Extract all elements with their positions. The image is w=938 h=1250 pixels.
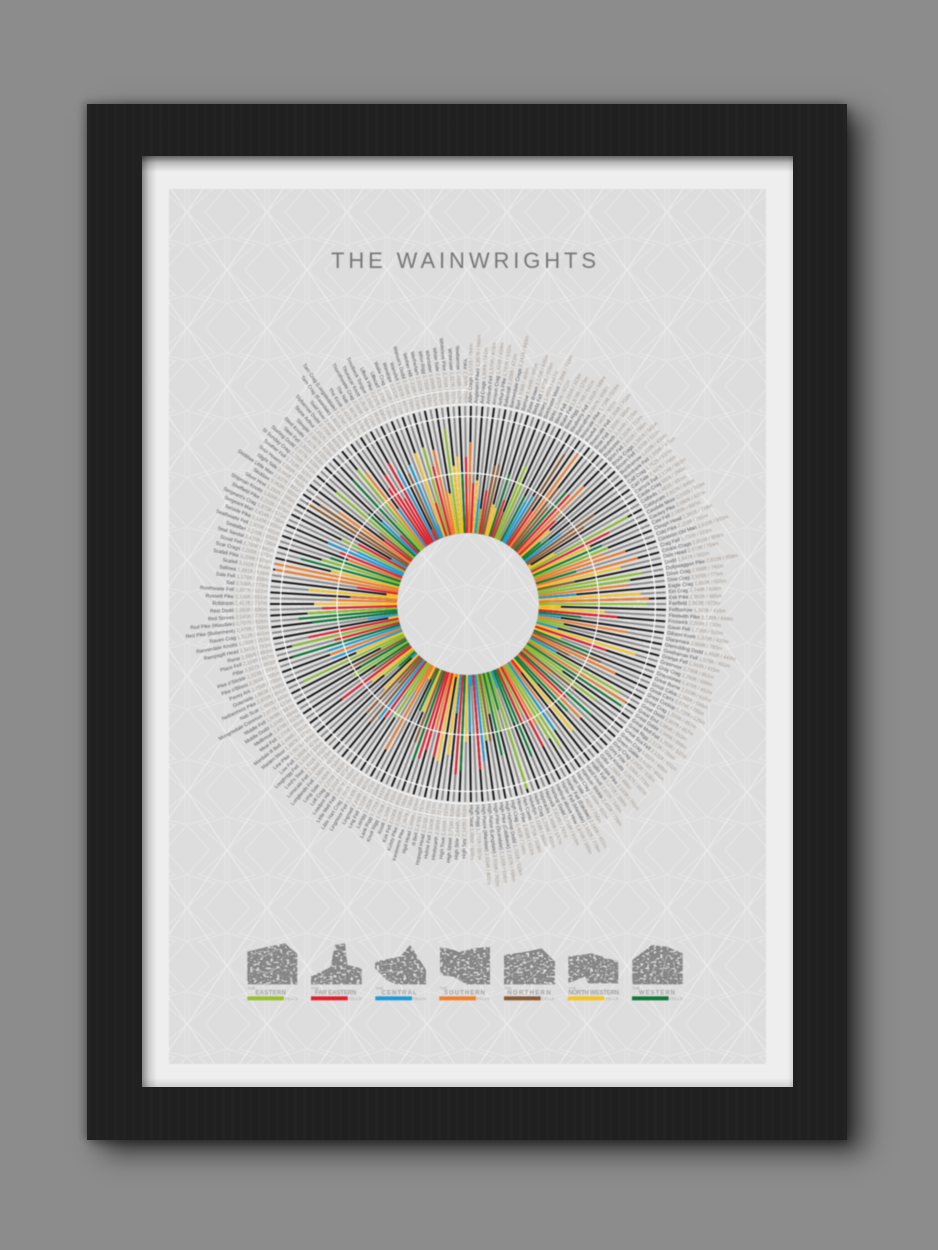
fell labels: High Spy to Yoke, left half: Stone Arthur 1,652ft / 503m xyxy=(293,405,338,455)
fell labels: Allen Crags to High Seat, right half: Allen Crags 2,572ft / 784m xyxy=(468,344,475,403)
fell labels: Allen Crags to High Seat, right half: Angletarn Pikes 1,857ft / 566m xyxy=(474,335,483,403)
fell labels: High Spy to Yoke, left half: Mardale Ill Bell 2,496ft / 761m xyxy=(253,723,309,767)
fell labels: High Spy to Yoke, left half: Skiddaw 3,053ft / 931m xyxy=(252,467,299,500)
fell labels: Allen Crags to High Seat, right half: Black Fell 1,056ft / 323m xyxy=(554,373,583,425)
fell labels: Allen Crags to High Seat, right half: Grange Fell 1,363ft / 415m xyxy=(661,653,720,675)
fell labels: High Spy to Yoke, left half: Whinlatter 1,696ft / 525m xyxy=(424,350,438,406)
fell labels: High Spy to Yoke, left half: Long Side 2,405ft / 734m xyxy=(302,757,342,804)
fell labels: Allen Crags to High Seat, right half: Blake Fell 1,878ft / 573m xyxy=(559,376,590,428)
fell labels: High Spy to Yoke, left half: Thornthwaite Crag 2,569ft / 784m xyxy=(330,363,372,430)
fell labels: High Spy to Yoke, left half: Rest Dodd 2,283ft / 696m xyxy=(210,607,267,615)
fell labels: High Spy to Yoke, left half: Lonscale Fell 2,344ft / 715m xyxy=(286,749,333,799)
fell labels: Allen Crags to High Seat, right half: Grey Knotts 2,287ft / 697m xyxy=(603,749,648,797)
fell labels: Allen Crags to High Seat, right half: Glaramara 2,569ft / 783m xyxy=(665,636,723,652)
legend: Western Fells: FELLS xyxy=(670,996,683,1001)
fell labels: Allen Crags to High Seat, right half: Brae Fell 1,920ft / 586m xyxy=(594,406,632,451)
title: THE WAINWRIGHTS xyxy=(331,248,596,273)
legend: North Western Fells: NORTH WESTERN xyxy=(568,991,619,997)
fell labels: High Spy to Yoke, left half: Meal Fell 1,770ft / 550m xyxy=(258,718,306,754)
fell labels: High Spy to Yoke, left half: Rossett Pike 2,106ft / 651m xyxy=(206,593,267,601)
fell labels: High Spy to Yoke, left half: Little Mell Fell 1,657ft / 505m xyxy=(315,768,357,824)
legend of fell regions xyxy=(247,943,683,1001)
fell labels: Allen Crags to High Seat, right half: High Hartsop Dodd 1,702ft / 519m xyxy=(503,801,523,876)
fell labels: High Spy to Yoke, left half: Nethermost Pike 2,920ft / 891m xyxy=(221,687,287,722)
fell labels: High Spy to Yoke, left half: Skiddaw Little Man 2,837ft / 865m xyxy=(236,449,302,495)
fell labels: High Spy to Yoke, left half: Little Hart Crag 2,091ft / 637m xyxy=(320,771,362,831)
fell labels: Allen Crags to High Seat, right half: Great Borne 2,019ft / 616m xyxy=(653,676,712,704)
fell labels: High Spy to Yoke, left half: Steel Fell 1,811ft / 553m xyxy=(282,426,325,467)
fell labels: High Spy to Yoke, left half: Scoat Fell 2,760ft / 841m xyxy=(219,534,275,555)
fell labels: High Spy to Yoke, left half: Scafell Pike 3,209ft / 978m xyxy=(212,548,272,566)
fell labels: High Spy to Yoke, left half: Slight Side 2,499ft / 762m xyxy=(255,452,306,490)
fell labels: High Spy to Yoke, left half xyxy=(185,338,468,866)
fell labels: Allen Crags to High Seat, right half: High Raise (Mardale) 2,634ft / 802m xyxy=(480,804,492,885)
fell labels: Allen Crags to High Seat, right half: Gibson Knott 1,379ft / 420m xyxy=(666,630,729,645)
fell labels: High Spy to Yoke, left half: Steel Knotts 1,417ft / 432m xyxy=(282,416,329,463)
fell labels: Allen Crags to High Seat, right half: Hartsop above How 1,870ft / 580m xyxy=(554,783,593,855)
fell labels: Allen Crags to High Seat, right half: Arnison Crag 1,424ft / 434m xyxy=(492,342,506,405)
fell labels: High Spy to Yoke, left half: Seat Sandal 2,415ft / 736m xyxy=(217,526,276,549)
fell labels: Allen Crags to High Seat, right half: Helm Crag 1,299ft / 405m xyxy=(532,793,556,849)
poster print with geometric pattern xyxy=(169,189,766,1064)
fell labels: High Spy to Yoke, left half: The Nab 1,887ft / 576m xyxy=(334,385,367,433)
fell labels: Allen Crags to High Seat, right half: Ard Crags 1,906ft / 581m xyxy=(480,348,490,404)
fell labels: Allen Crags to High Seat, right half: Great Carrs 2,575ft / 785m xyxy=(649,687,705,718)
fell labels: High Spy to Yoke, left half: High Stile 2,644ft / 806m xyxy=(454,805,462,860)
fell labels: High Spy to Yoke, left half: Tarn Crag (Longsleddale) 2,176ft / 664m xyxy=(301,363,357,440)
fell labels: Allen Crags to High Seat, right half: Heron Pike 2,008ft / 612m xyxy=(515,798,535,856)
legend: North Western Fells xyxy=(568,953,619,1001)
fell labels: Allen Crags to High Seat, right half: High Crag 2,443ft / 744m xyxy=(509,800,527,855)
fell labels: High Spy to Yoke, left half: Hopegill Head 2,525ft / 770m xyxy=(415,801,433,866)
fell labels: High Spy to Yoke, left half: Whin Rigg 1,755ft / 535m xyxy=(416,351,433,407)
fell labels: Allen Crags to High Seat, right half: Crag Fell 1,710ft / 523m xyxy=(660,528,713,549)
fell labels: High Spy to Yoke, left half: Knott Rigg 1,790ft / 556m xyxy=(366,788,393,843)
fell labels: Allen Crags to High Seat, right half: Birkhouse Moor 2,356ft / 718m xyxy=(543,354,575,420)
fell labels: Allen Crags to High Seat, right half: Harter Fell (Mardale) 2,552ft / 778m xyxy=(559,780,601,854)
fell labels: High Spy to Yoke, left half: Stybarrow Dodd 2,770ft / 843m xyxy=(294,394,342,451)
fell labels: Allen Crags to High Seat, right half: Grike 1,596ft / 488m xyxy=(598,753,633,791)
legend: Southern Fells: THE xyxy=(439,985,448,990)
fell labels: High Spy to Yoke, left half: High Spy 2,143ft / 653m xyxy=(461,805,468,859)
fell labels: Allen Crags to High Seat, right half: Great Dodd 2,807ft / 857m xyxy=(640,703,694,738)
fell labels: Allen Crags to High Seat, right half: Base Brown 2,120ft / 646m xyxy=(526,354,550,413)
fell labels: Allen Crags to High Seat, right half: Gavel Fell 1,726ft / 526m xyxy=(667,624,723,637)
fell labels: High Spy to Yoke, left half: Loadpot Hill 2,201ft / 671m xyxy=(312,764,352,816)
fell labels: Allen Crags to High Seat, right half: Dodd 1,647ft / 502m xyxy=(664,551,710,566)
fell labels: Allen Crags to High Seat, right half: Hen Comb 1,670ft / 509m xyxy=(521,796,542,853)
fell labels: High Spy to Yoke, left half: Kentmere Pike 2,397ft / 730m xyxy=(391,796,415,862)
fell labels: High Spy to Yoke, left half: Whiteless Pike 2,159ft / 660m xyxy=(438,338,450,404)
legend: North Western Fells: THE xyxy=(568,985,577,990)
fell labels: Allen Crags to High Seat, right half: Clough Head 2,381ft / 726m xyxy=(653,503,714,532)
fell labels: Allen Crags to High Seat, right half: Hallin Fell 1,271ft / 388m xyxy=(589,761,628,808)
fell labels: Allen Crags to High Seat, right half: Caw Fell 2,288ft / 697m xyxy=(651,500,702,526)
legend: Eastern Fells: EASTERN xyxy=(255,991,286,997)
legend: Far Eastern Fells xyxy=(311,943,362,1001)
fell labels: Allen Crags to High Seat, right half: Castle Crag 985ft / 290m xyxy=(637,465,687,500)
fell labels: High Spy to Yoke, left half: Yewbarrow 2,058ft / 628m xyxy=(454,345,462,403)
radial chart xyxy=(139,335,738,913)
legend: Eastern Fells: THE xyxy=(247,985,256,990)
legend: Western Fells: THE xyxy=(632,985,640,990)
fell labels: High Spy to Yoke, left half: Rosthwaite Fell 1,807ft / 551m xyxy=(200,585,268,595)
fell labels: Allen Crags to High Seat, right half: Great Rigg 2,513ft / 766m xyxy=(627,723,676,762)
fell labels: Allen Crags to High Seat, right half: Barrow 1,494ft / 455m xyxy=(521,363,540,412)
fell labels: High Spy to Yoke, left half: Mellbreak 1,676ft / 512m xyxy=(253,713,302,748)
legend: Far Eastern Fells: FELLS xyxy=(349,996,362,1001)
fell labels: Allen Crags to High Seat, right half: Hartsop Dodd 2,018ft / 618m xyxy=(548,786,580,847)
fell labels: High Spy to Yoke, left half: Pike o'Stickle 2,323ft / 709m xyxy=(217,665,278,691)
fell labels: High Spy to Yoke, left half: The Knott 2,423ft / 739m xyxy=(327,387,362,437)
fell labels: High Spy to Yoke, left half: Starling Dodd 2,077ft / 633m xyxy=(270,424,321,471)
fell labels: High Spy to Yoke, left half: Kidsty Pike 2,560ft / 780m xyxy=(386,795,410,852)
fell labels: Allen Crags to High Seat, right half: Great Cockup 1,720ft / 526m xyxy=(646,692,706,727)
fell labels: High Spy to Yoke, left half: Pike o'Blisco 2,304ft / 705m xyxy=(221,671,280,697)
fell labels: Allen Crags to High Seat, right half: Calf Crag 1,762ft / 537m xyxy=(627,448,674,485)
fell labels: Allen Crags to High Seat, right half: Fairfield 2,863ft / 873m xyxy=(669,601,720,607)
fell labels: High Spy to Yoke, left half: Walla Crag 1,234ft / 379m xyxy=(372,361,399,417)
fell labels: Allen Crags to High Seat, right half: Broom Fell 1,670ft / 511m xyxy=(615,429,662,471)
fell labels: Allen Crags to High Seat, right half: Great Sca Fell 2,131ft / 651m xyxy=(623,727,678,773)
fell labels: Allen Crags to High Seat, right half: Great End 2,984ft / 910m xyxy=(637,708,688,743)
fell labels: Allen Crags to High Seat, right half: Barf 1,536ft / 468m xyxy=(515,367,531,410)
fell labels: High Spy to Yoke, left half: Hindscarth 2,385ft / 727m xyxy=(431,803,444,860)
fell labels: High Spy to Yoke, left half: Low Pike 1,667ft / 508m xyxy=(272,732,317,771)
legend: Central Fells: FELLS xyxy=(413,996,426,1001)
fell labels: Allen Crags to High Seat, right half: Graystones 1,476ft / 452m xyxy=(656,671,713,697)
fell labels: Allen Crags to High Seat, right half: Helvellyn 3,118ft / 950m xyxy=(526,795,548,847)
legend: Western Fells: WESTERN xyxy=(639,991,675,997)
fell labels: Allen Crags to High Seat, right half: Branstree 2,333ft / 713m xyxy=(603,414,644,459)
fell labels: Allen Crags to High Seat, right half: Armboth Fell 1,570ft / 479m xyxy=(486,342,498,404)
fell labels: Allen Crags to High Seat, right half: Causey Pike 2,090ft / 637m xyxy=(649,490,707,521)
legend: Western Fells xyxy=(632,945,683,1001)
fell labels: High Spy to Yoke, left half: Pillar 2,927ft / 892m xyxy=(232,659,276,678)
fell labels: Allen Crags to High Seat, right half: High Pike (Caldbeck) 2,157ft / 658m xyxy=(498,802,516,882)
fell labels: Allen Crags to High Seat, right half: Cold Pike 2,259ft / 701m xyxy=(656,513,709,537)
legend: Eastern Fells: FELLS xyxy=(285,996,298,1001)
fell labels: High Spy to Yoke, left half: Maiden Moor 1,887ft / 575m xyxy=(260,727,313,771)
fell labels: Allen Crags to High Seat, right half: Bannerdale Crags 2,241ft / 683m xyxy=(509,335,531,408)
fell labels: High Spy to Yoke, left half: Low Fell 1,360ft / 423m xyxy=(278,737,321,776)
white guide rings xyxy=(254,390,682,818)
fell labels: Allen Crags to High Seat, right half: Bleaberry Fell 1,932ft / 589m xyxy=(569,375,608,433)
fell labels: Allen Crags to High Seat, right half: Fellbarrow 1,363ft / 416m xyxy=(669,607,726,615)
fell labels: High Spy to Yoke, left half: Troutbeck Tongue 1,191ft / 364m xyxy=(345,357,382,425)
black and grey spokes xyxy=(139,347,729,913)
fell labels: High Spy to Yoke, left half: Red Pike (Wasdale) 2,707ft / 826m xyxy=(190,619,268,631)
fell labels: Allen Crags to High Seat, right half: Crinkle Crags 2,816ft / 859m xyxy=(661,532,724,555)
fell labels: Allen Crags to High Seat, right half: Catbells 1,481ft / 451m xyxy=(640,474,687,505)
fell labels: Allen Crags to High Seat, right half: Gowbarrow Fell 1,579ft / 481m xyxy=(663,648,731,670)
fell labels: Allen Crags to High Seat, right half: Dollywaggon Pike 2,810ft / 858m xyxy=(665,553,738,572)
fell labels: High Spy to Yoke, left half: Tarn Crag (Easedale) 1,801ft / 550m xyxy=(299,375,352,444)
fell labels: High Spy to Yoke, left half: High Tove 1,665ft / 515m xyxy=(439,804,450,859)
fell labels: Allen Crags to High Seat, right half: Green Gable 2,628ft / 801m xyxy=(615,737,665,783)
fell labels: Allen Crags to High Seat, right half: Buckbarrow 1,410ft / 430m xyxy=(619,433,669,476)
fell labels: Allen Crags to High Seat, right half: Dove Crag 2,598ft / 792m xyxy=(666,563,724,578)
fell labels: High Spy to Yoke, left half: Silver How 1,292ft / 395m xyxy=(244,471,296,505)
fell labels: High Spy to Yoke, left half: Raise 2,889ft / 883m xyxy=(227,648,273,665)
fell labels: High Spy to Yoke, left half: Robinson 2,417ft / 737m xyxy=(213,601,267,607)
fell labels: Allen Crags to High Seat, right half: Caudale Moor 2,502ft / 763m xyxy=(646,481,706,516)
fell labels: Allen Crags to High Seat, right half: Coniston Old Man 2,633ft / 803m xyxy=(658,514,729,543)
fell labels: High Spy to Yoke, left half: Thunacar Knott 2,351ft / 723m xyxy=(340,365,377,428)
fell labels: High Spy to Yoke, left half: Sale Fell 1,178ft / 359m xyxy=(216,571,269,584)
fell labels: High Spy to Yoke, left half: Ling Fell 1,224ft / 373m xyxy=(347,780,377,829)
fell labels: High Spy to Yoke, left half: Scafell 3,162ft / 964m xyxy=(222,557,271,572)
fell labels: High Spy to Yoke, left half: Loughrigg Fell 1,101ft / 335m xyxy=(274,741,325,790)
fell labels: High Spy to Yoke, left half: St Sunday Crag 2,756ft / 841m xyxy=(261,427,317,476)
fell labels: Allen Crags to High Seat, right half: Dale Head 2,473ft / 754m xyxy=(663,541,720,560)
fell labels: Allen Crags to High Seat, right half: Grasmoor 2,795ft / 851m xyxy=(660,659,715,681)
coloured bars by fell height xyxy=(275,429,649,789)
fell labels: High Spy to Yoke, left half: Wether Hill 2,210ft / 670m xyxy=(401,353,421,410)
fell labels: Allen Crags to High Seat, right half: Haystacks 1,959ft / 597m xyxy=(537,791,563,845)
fell labels: High Spy to Yoke, left half: Lingmell 2,649ft / 807m xyxy=(341,778,372,826)
fell labels: Allen Crags to High Seat, right half: High Rigg 1,171ft / 357m xyxy=(474,805,482,860)
fell labels: Allen Crags to High Seat, right half: Catstycam 2,917ft / 890m xyxy=(643,478,696,510)
fell labels: High Spy to Yoke, left half: Kirk Fell 2,630ft / 802m xyxy=(382,793,404,843)
fell labels: High Spy to Yoke, left half: Whiteside 2,317ft / 707m xyxy=(446,348,456,404)
fell labels: High Spy to Yoke, left half: Pavey Ark 2,288ft / 700m xyxy=(229,676,283,703)
fell labels: High Spy to Yoke, left half: Wandope 2,533ft / 772m xyxy=(381,362,404,415)
fell labels: High Spy to Yoke, left half: Rampsgill Head 2,581ft / 792m xyxy=(203,642,272,662)
fell labels: Allen Crags to High Seat, right half: Grey Friar 2,536ft / 773m xyxy=(607,745,650,789)
fell labels: High Spy to Yoke, left half: Souther Fell 1,713ft / 522m xyxy=(262,438,313,481)
legend: Southern Fells: FELLS xyxy=(477,996,490,1001)
fell labels: High Spy to Yoke, left half: Watson's Dodd 2,584ft / 789m xyxy=(391,346,415,412)
fell labels: High Spy to Yoke, left half: Seathwaite Fell 1,970ft / 601m xyxy=(215,508,280,537)
fell labels: High Spy to Yoke, left half: Sour Howes 1,568ft / 483m xyxy=(257,444,309,485)
fell labels: High Spy to Yoke, left half: Holme Fell 1,040ft / 317m xyxy=(423,802,438,859)
fell labels: High Spy to Yoke, left half: Sail 2,536ft / 773m xyxy=(226,580,268,589)
fell labels: Allen Crags to High Seat, right half: Fleetwith Pike 2,126ft / 648m xyxy=(668,613,733,623)
fell labels: Allen Crags to High Seat, right half: Burnbank Fell 1,558ft / 475m xyxy=(623,436,677,481)
legend: Far Eastern Fells: FAR EASTERN xyxy=(315,991,356,997)
fell labels: Allen Crags to High Seat, right half: Brandreth 2,344ft / 715m xyxy=(598,409,639,455)
fell labels: High Spy to Yoke, left half: White Side 2,832ft / 863m xyxy=(431,347,444,405)
fell labels: Allen Crags to High Seat, right half xyxy=(468,335,738,887)
fell labels: Allen Crags to High Seat, right half: Harrison Stickle 2,403ft / 736m xyxy=(579,768,623,828)
fell labels: High Spy to Yoke, left half: Sheffield Pike 2,215ft / 675m xyxy=(230,482,290,516)
fell labels: Allen Crags to High Seat, right half: High Pike (Scandale) 2,155ft / 656m xyxy=(492,803,508,883)
fell labels: Allen Crags to High Seat, right half: Great Crag 1,500ft / 457m xyxy=(643,698,697,731)
legend: Southern Fells xyxy=(439,947,490,1001)
fell labels: Allen Crags to High Seat, right half: Birks 2,040ft / 622m xyxy=(548,379,572,422)
fell labels: High Spy to Yoke, left half: Sallows 1,691ft / 516m xyxy=(219,564,270,578)
fell labels: Allen Crags to High Seat, right half: Great Calva 2,265ft / 690m xyxy=(651,682,708,711)
fell labels: Allen Crags to High Seat, right half: Great Gable 2,949ft / 899m xyxy=(634,713,688,751)
fell labels: Allen Crags to High Seat, right half: Dow Crag 2,555ft / 779m xyxy=(667,571,723,584)
fell labels: Allen Crags to High Seat, right half: Hard Knott 1,803ft / 549m xyxy=(584,764,623,814)
fell labels: High Spy to Yoke, left half: Illgill Head 1,998ft / 609m xyxy=(402,798,421,854)
fell labels: High Spy to Yoke, left half: Lank Rigg 1,775ft / 541m xyxy=(359,786,388,839)
fell labels: Allen Crags to High Seat, right half: Eagle Crag 1,650ft / 503m xyxy=(668,578,727,589)
fell labels: High Spy to Yoke, left half: Seatallan 2,270ft / 692m xyxy=(225,520,278,543)
fell labels: Allen Crags to High Seat, right half: Haycock 2,618ft / 797m xyxy=(543,788,569,839)
fell labels: Allen Crags to High Seat, right half: Bowscale Fell 2,306ft / 702m xyxy=(589,393,633,447)
fell labels: Allen Crags to High Seat, right half: Esk Pike 2,903ft / 885m xyxy=(669,593,722,601)
fell labels: Allen Crags to High Seat, right half: Froswick 2,359ft / 720m xyxy=(668,619,721,629)
fell labels: High Spy to Yoke, left half: Loft Crag 2,270ft / 682m xyxy=(309,761,347,807)
legend: Southern Fells: SOUTHERN xyxy=(444,991,485,997)
fell labels: Allen Crags to High Seat, right half: Bowfell 2,960ft / 902m xyxy=(584,400,618,444)
legend: Far Eastern Fells: THE xyxy=(311,985,319,990)
fell labels: High Spy to Yoke, left half: Ill Bell 2,476ft / 757m xyxy=(411,800,427,846)
fell labels: Allen Crags to High Seat, right half: Glenridding Dodd 1,450ft / 442m xyxy=(664,642,736,663)
fell labels: Allen Crags to High Seat, right half: Blencathra 2,847ft / 868m xyxy=(574,385,610,437)
fell labels: High Spy to Yoke, left half: Longlands Fell 1,580ft / 483m xyxy=(290,753,338,807)
fell labels: Allen Crags to High Seat, right half: High Raise (Langdale) 2,500ft / 762m xyxy=(486,804,500,887)
fell labels: Allen Crags to High Seat, right half: High Seat 1,995ft / 608m xyxy=(468,805,475,860)
picture frame xyxy=(87,104,847,1140)
fell labels: High Spy to Yoke, left half: Nab Scar 1,450ft / 440m xyxy=(239,692,290,722)
fell labels: High Spy to Yoke, left half: Ullscarf 2,370ft / 726m xyxy=(368,371,393,420)
fell labels: Allen Crags to High Seat, right half: Green Crag 1,602ft / 489m xyxy=(619,732,668,775)
fell labels: High Spy to Yoke, left half: Lingmoor Fell 1,530ft / 469m xyxy=(329,775,367,832)
legend: Northern Fells: FELLS xyxy=(542,996,555,1001)
fell labels: High Spy to Yoke, left half: Ullock Pike 2,230ft / 690m xyxy=(358,367,388,422)
legend: Central Fells: CENTRAL xyxy=(382,991,417,997)
fell labels: Allen Crags to High Seat, right half: Gray Crag 2,293ft / 699m xyxy=(658,665,713,689)
legend: Northern Fells: NORTHERN xyxy=(507,991,551,997)
legend: Central Fells xyxy=(375,945,426,1001)
fell labels: High Spy to Yoke, left half: High Street 2,718ft / 828m xyxy=(446,804,456,863)
legend: Eastern Fells xyxy=(247,943,298,1001)
fell labels: High Spy to Yoke, left half: Wansfell 1,597ft / 487m xyxy=(388,362,410,413)
white mat xyxy=(142,156,793,1087)
fell labels: Allen Crags to High Seat, right half: Carl Side 2,447ft / 746m xyxy=(630,454,678,490)
fell labels: Allen Crags to High Seat, right half: Bakestall 2,208ft / 673m xyxy=(503,353,519,407)
fell labels: High Spy to Yoke, left half: Place Fell 2,154ft / 657m xyxy=(220,653,275,674)
legend: North Western Fells: FELLS xyxy=(606,996,619,1001)
fell labels: High Spy to Yoke, left half: Swirl How 2,630ft / 802m xyxy=(308,400,347,447)
fell labels: High Spy to Yoke, left half: Latrigg 1,203ft / 368m xyxy=(355,783,382,830)
fell labels: Allen Crags to High Seat, right half: Great Mell Fell 1,760ft / 537m xyxy=(630,718,688,761)
fell labels: High Spy to Yoke, left half: Middle Fell 1,908ft / 582m xyxy=(243,703,296,737)
fell labels: High Spy to Yoke, left half: Rannerdale Knotts 1,160ft / 355m xyxy=(196,636,271,655)
legend: Northern Fells: THE xyxy=(504,985,512,990)
fell labels: Allen Crags to High Seat, right half: Grisedale Pike 2,593ft / 791m xyxy=(594,757,640,812)
fell labels: Allen Crags to High Seat, right half: Hart Crag 2,698ft / 822m xyxy=(574,771,609,821)
fell labels: High Spy to Yoke, left half: Scar Crags 2,205ft / 672m xyxy=(215,541,273,560)
fell labels: Allen Crags to High Seat, right half: Grey Crag 2,093ft / 638m xyxy=(611,741,656,784)
fell labels: High Spy to Yoke, left half: Lord's Seat 1,811ft / 552m xyxy=(284,745,329,791)
fell labels: High Spy to Yoke, left half: Yoke 2,309ft / 706m xyxy=(462,359,468,403)
fell labels: Allen Crags to High Seat, right half: Hart Side 2,481ft / 756m xyxy=(569,775,602,824)
fell labels: Allen Crags to High Seat, right half: Carrock Fell 2,174ft / 663m xyxy=(634,457,687,495)
fell labels: High Spy to Yoke, left half: Steeple 2,687ft / 819m xyxy=(295,418,333,459)
fell labels: High Spy to Yoke, left half: Shipman Knotts 1,926ft / 587m xyxy=(230,472,293,510)
fell labels: High Spy to Yoke, left half: Selside Pike 2,149ft / 655m xyxy=(224,504,283,532)
fell labels: Allen Crags to High Seat, right half: Arthur's Pike 1,747ft / 532m xyxy=(498,344,513,406)
legend: Northern Fells xyxy=(504,948,555,1001)
fell labels: High Spy to Yoke, left half: Red Pike (Buttermere) 2,479ft / 756m xyxy=(185,624,269,640)
fell labels: High Spy to Yoke, left half: Knott 2,329ft / 710m xyxy=(377,791,399,835)
fell labels: High Spy to Yoke, left half: Wetherlam 2,502ft / 763m xyxy=(409,351,427,408)
fell labels: Allen Crags to High Seat, right half: Blea Rigg 1,776ft / 541m xyxy=(564,379,596,430)
fell labels: High Spy to Yoke, left half: Red Screes 2,545ft / 776m xyxy=(208,613,268,622)
fell labels: High Spy to Yoke, left half: Sergeant Man 2,414ft / 736m xyxy=(223,495,285,526)
fell labels: Allen Crags to High Seat, right half: Beda Fell 1,670ft / 509m xyxy=(532,362,555,415)
fell labels: Allen Crags to High Seat, right half: Brock Crags 1,842ft / 561m xyxy=(611,421,659,467)
fell labels: High Spy to Yoke, left half: Raven Crag 1,512ft / 461m xyxy=(209,630,270,645)
fell labels: Allen Crags to High Seat, right half: Brim Fell 2,611ft / 796m xyxy=(607,421,648,463)
fell labels: High Spy to Yoke, left half: Sergeant's Crag 1,873ft / 571m xyxy=(222,486,287,521)
legend: Central Fells: THE xyxy=(375,985,384,990)
fell labels: Allen Crags to High Seat, right half: Harter Fell (Eskdale) 2,140ft / 653m xyxy=(564,778,608,850)
fell labels: Allen Crags to High Seat, right half: Eel Crag 2,749ft / 838m xyxy=(668,586,722,595)
fell labels: High Spy to Yoke, left half: Outerside 1,863ft / 568m xyxy=(232,682,285,709)
fell labels: Allen Crags to High Seat, right half: Bonscale Pike 1,718ft / 524m xyxy=(579,383,621,440)
fell labels: Allen Crags to High Seat, right half: Binsey 1,466ft / 447m xyxy=(537,370,560,417)
fell labels: High Spy to Yoke, left half: Middle Dodd 2,106ft / 654m xyxy=(244,708,299,746)
fell labels: High Spy to Yoke, left half: Mungrisdale Common 2,077ft / 633m xyxy=(218,698,293,742)
